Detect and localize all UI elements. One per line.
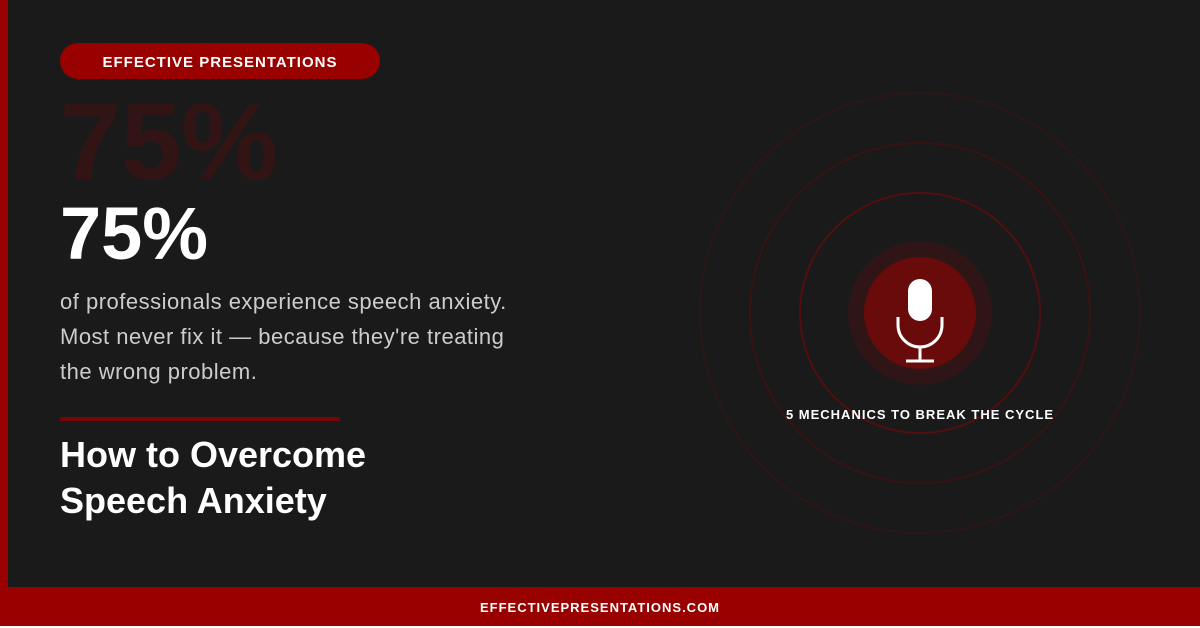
- badge: effective presentations: [60, 43, 380, 79]
- headline: Speech Anxiety: [60, 480, 327, 521]
- middle ring: [750, 143, 1090, 483]
- headline: How to Overcome: [60, 434, 366, 475]
- footer band: [0, 587, 1200, 626]
- footer band: EFFECTIVEPRESENTATIONS.COM: [480, 600, 720, 615]
- divider rule: [60, 417, 340, 421]
- description text: Most never fix it — because they're treating: [60, 324, 504, 349]
- outer ring: [700, 93, 1140, 533]
- graphic caption: 5 MECHANICS TO BREAK THE CYCLE: [786, 407, 1054, 422]
- icon: microphone: [898, 279, 942, 361]
- description text: of professionals experience speech anxiety.: [60, 289, 507, 314]
- inner ring: [800, 193, 1040, 433]
- ghost statistic: 75%: [60, 81, 278, 203]
- main statistic: 75%: [60, 192, 208, 275]
- badge: effective presentations: EFFECTIVE PRESENTATIONS: [103, 54, 337, 71]
- halo circle: [848, 241, 992, 385]
- core circle: [864, 257, 976, 369]
- graphic: concentric rings and microphone: [699, 92, 1141, 534]
- left accent bar: [0, 0, 8, 626]
- description text: [60, 289, 507, 384]
- headline: [60, 434, 366, 521]
- description text: the wrong problem.: [60, 359, 257, 384]
